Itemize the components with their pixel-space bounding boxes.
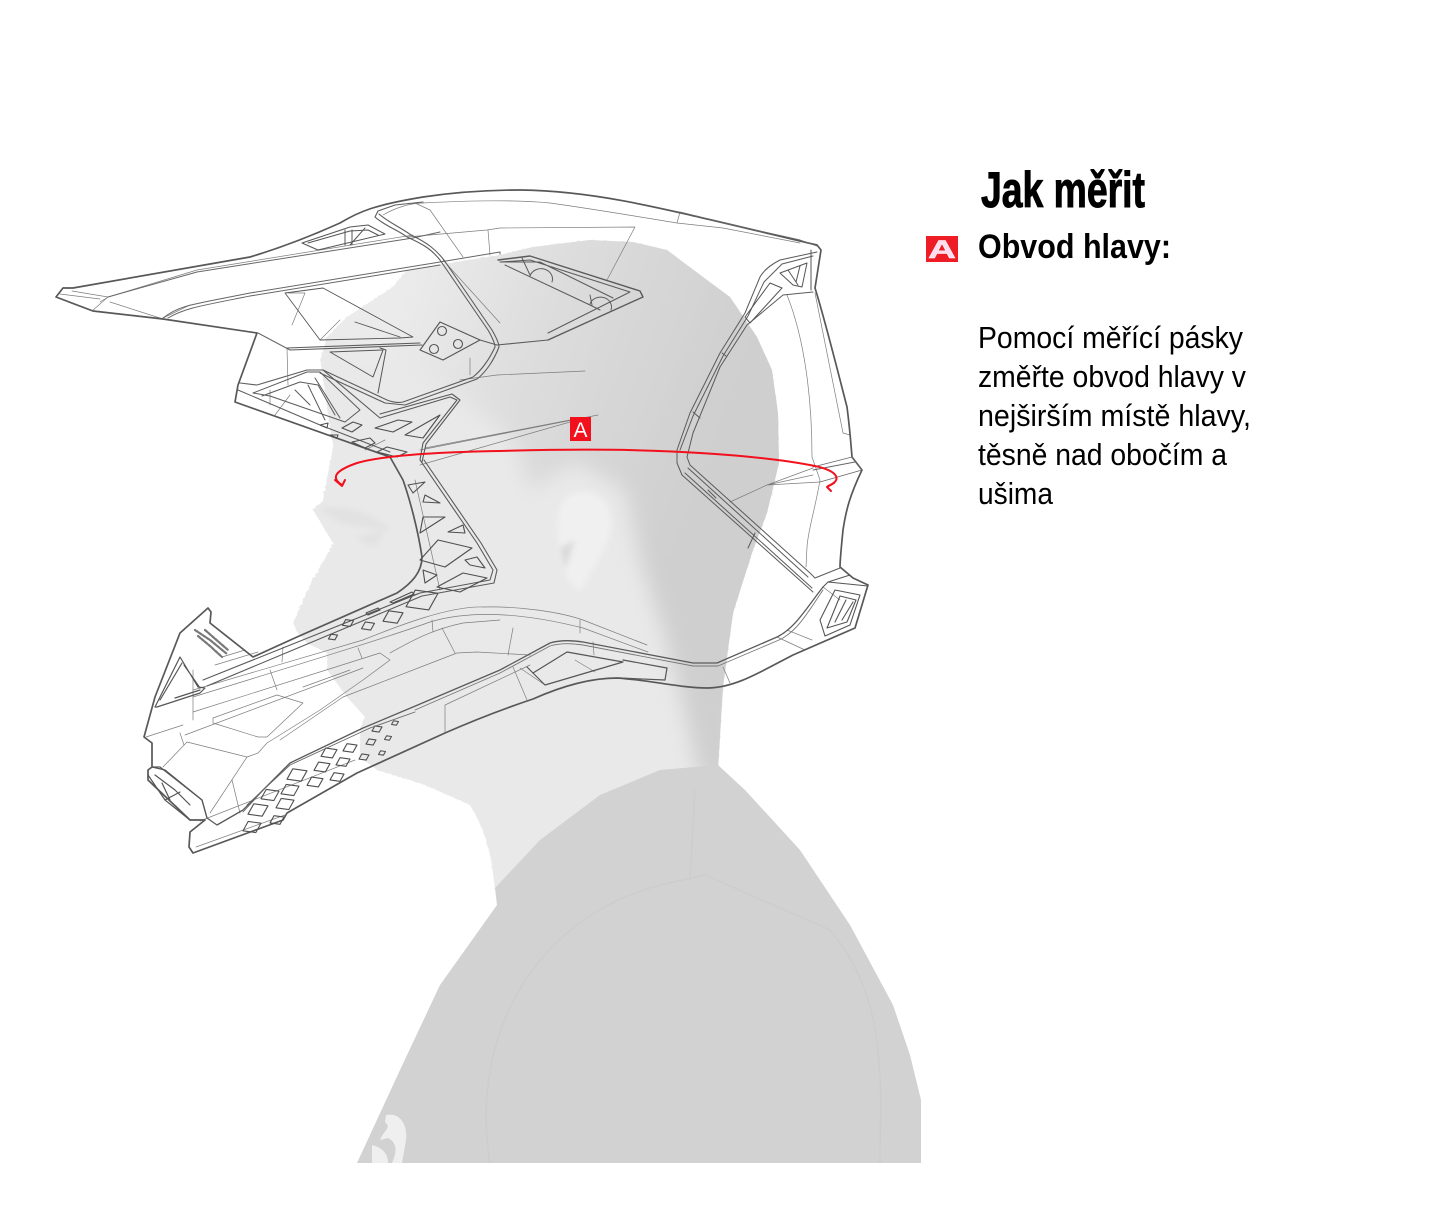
rear top vents bbox=[745, 250, 811, 323]
shirt bbox=[357, 765, 921, 1163]
helmet line drawing bbox=[56, 190, 868, 853]
visor top vent bbox=[302, 225, 385, 250]
title: Jak měřit bbox=[981, 162, 1145, 218]
visor side triangle vent bbox=[285, 288, 413, 340]
instructions text block: ušima bbox=[978, 476, 1054, 511]
eye port mesh holes bbox=[320, 415, 487, 592]
head and neck bbox=[293, 240, 779, 890]
main seam bbox=[240, 202, 499, 405]
visor and shell outline bbox=[56, 190, 868, 853]
side bracket with rivets bbox=[420, 322, 480, 360]
marker A on helmet bbox=[570, 417, 591, 442]
legend marker A bbox=[926, 236, 958, 264]
upper chin bar holes bbox=[328, 590, 438, 640]
marker A on helmet: A bbox=[573, 419, 588, 442]
chin logo vent bbox=[155, 657, 205, 707]
helmet thin panel lines bbox=[60, 201, 850, 847]
shirt logo bbox=[372, 1115, 406, 1163]
rear lower vent bbox=[820, 575, 868, 636]
neck roll band bbox=[152, 587, 823, 825]
brow window vent bbox=[330, 348, 386, 393]
chin brand mark bbox=[195, 630, 228, 657]
shirt seam bbox=[486, 790, 881, 1163]
lower side vent bbox=[527, 652, 667, 685]
eye and brow shading bbox=[318, 507, 392, 548]
lower chin bar holes bbox=[243, 721, 398, 833]
instructions text block bbox=[978, 320, 1251, 511]
rear window frame bbox=[677, 252, 840, 592]
instructions text block: Pomocí měřící pásky bbox=[978, 320, 1243, 355]
eye port inner ridge bbox=[203, 370, 497, 686]
instructions text block: změřte obvod hlavy v bbox=[978, 359, 1246, 394]
measuring arc A bbox=[335, 450, 837, 491]
eye port cavity bbox=[238, 372, 390, 452]
instructions text block: nejširším místě hlavy, bbox=[978, 398, 1251, 433]
infographic canvas bbox=[55, 169, 1248, 1163]
mouth vent bbox=[148, 767, 207, 820]
top rear vent bbox=[498, 256, 643, 340]
hair bbox=[332, 240, 779, 767]
rear ridge bbox=[680, 212, 862, 482]
person silhouette photo bbox=[293, 220, 921, 1163]
visor lower band bbox=[108, 232, 500, 350]
subheading: Obvod hlavy: bbox=[978, 228, 1171, 266]
ear bbox=[557, 492, 611, 590]
legend marker A: A bbox=[928, 236, 956, 264]
chin bar long edge bbox=[243, 712, 415, 812]
instructions text block: těsně nad obočím a bbox=[978, 437, 1228, 472]
